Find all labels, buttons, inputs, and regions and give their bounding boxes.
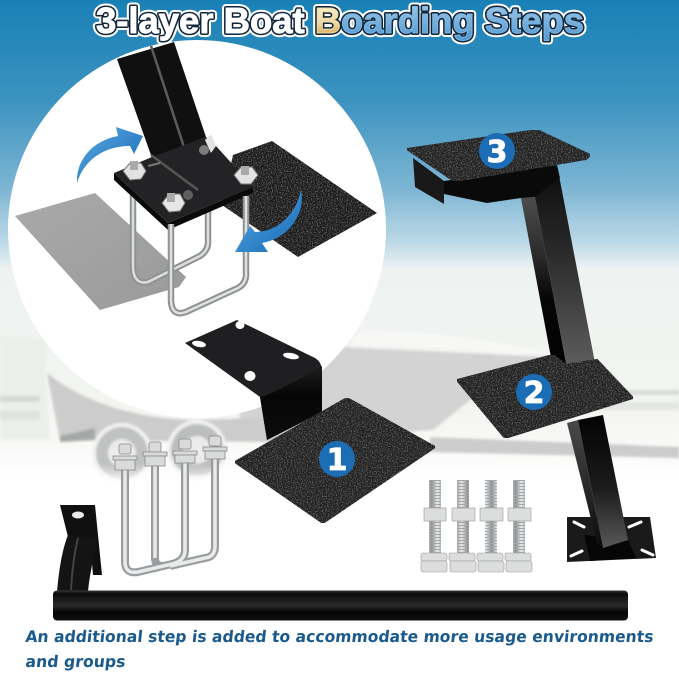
caption — [25, 627, 655, 671]
badge 1 — [319, 441, 355, 478]
long horizontal black tube — [53, 590, 628, 620]
step assembly with pads 2 and 3 — [407, 130, 656, 562]
detail: black square tube — [117, 42, 206, 190]
badge 3 — [479, 133, 515, 170]
detail: mounting plate with bolts — [114, 134, 258, 230]
caption line 1: An additional step is added to accommodate more usage environments — [25, 627, 655, 646]
upper column — [521, 165, 596, 368]
icon: curved blue arrow left — [77, 127, 143, 183]
detail: rear U-bolt — [133, 195, 208, 282]
step 2 textured pad — [457, 355, 633, 438]
title dark outline: 3-layer Boat Boarding Steps — [96, 0, 584, 41]
loose hex bolts — [421, 480, 532, 572]
icon: hex nut left — [123, 163, 146, 180]
icon: nuts on U-bolt ends — [113, 436, 227, 470]
step 3 textured pad — [407, 130, 590, 181]
lower column — [567, 415, 628, 548]
step 3 underside bracket — [413, 158, 560, 204]
detail: textured rubber step pad — [222, 141, 377, 257]
icon: curved blue arrow right — [235, 190, 302, 252]
title fill: 3-layer Boat Boarding Steps — [96, 0, 584, 41]
bracket bent plate — [185, 320, 322, 440]
detail: front U-bolt — [171, 196, 246, 313]
bolt nuts — [421, 508, 532, 572]
title — [96, 0, 584, 41]
badge 2 — [516, 374, 552, 411]
step 1 bracket and pad — [185, 320, 435, 523]
icon: hex nut front — [162, 194, 185, 212]
bolt shafts — [429, 480, 525, 570]
ground fade — [0, 464, 679, 673]
icon: hex nut right — [234, 167, 258, 184]
base plate — [567, 517, 656, 562]
caption line 2: and groups — [25, 652, 127, 671]
step 1 textured pad — [235, 398, 435, 523]
badge 3: 3 — [487, 135, 507, 170]
background: faded boat on trailer — [0, 330, 679, 483]
badge 1: 1 — [327, 443, 347, 478]
detail: grey folded step shadow pad — [15, 193, 186, 310]
loose U-bolts — [113, 436, 227, 572]
title outer white outline: 3-layer Boat Boarding Steps — [96, 0, 584, 41]
white detail circle — [8, 40, 386, 418]
angled bracket arm — [57, 505, 102, 592]
badge 2: 2 — [524, 376, 544, 411]
